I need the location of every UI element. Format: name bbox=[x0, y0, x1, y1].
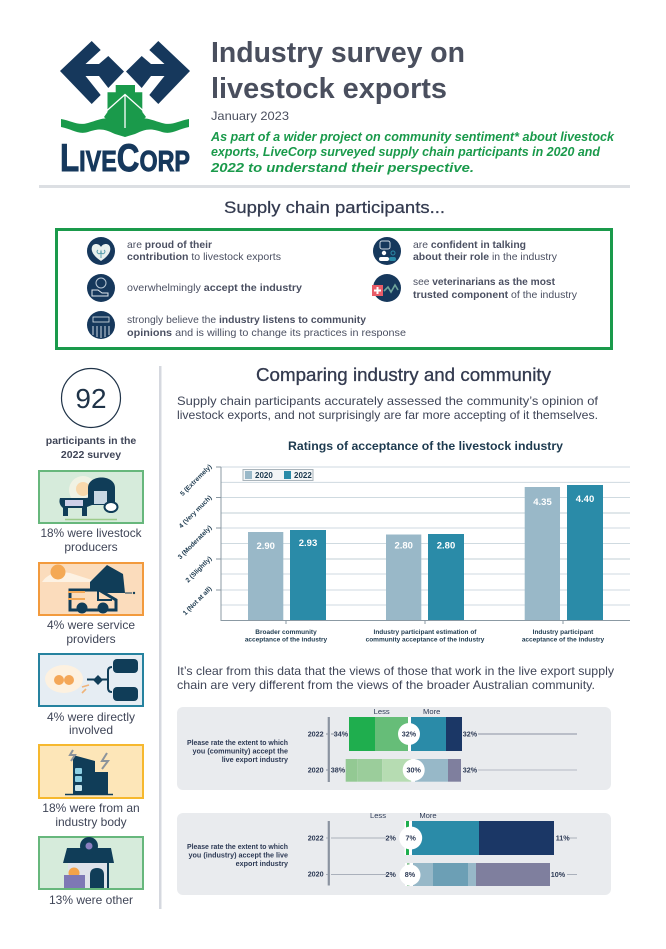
finding: listens: opinions and is willing to change its practices in response bbox=[127, 327, 406, 339]
card: service providers bbox=[39, 563, 143, 615]
card: livestock producers bbox=[39, 471, 143, 523]
title: Industry survey on bbox=[211, 37, 465, 69]
text block: comparing intro: Supply chain participants accurately assessed the community’s opinion of bbox=[177, 394, 599, 408]
bars 2022 bbox=[412, 821, 554, 855]
text block: views differ: chain are very different from the views of the broader Australian community. bbox=[177, 678, 595, 692]
bar values: 4.35 bbox=[533, 497, 552, 508]
legend: 2022 bbox=[294, 471, 312, 480]
label: livestock producers bbox=[40, 526, 142, 554]
finding: listens bbox=[127, 314, 406, 339]
legend bbox=[243, 470, 313, 480]
finding: veterinarians: trusted component of the industry bbox=[413, 289, 578, 301]
stat: 92 participants: participants in the bbox=[46, 435, 136, 447]
data labels: 2020 bbox=[308, 766, 324, 774]
panel: community acceptance chart bbox=[177, 707, 611, 790]
bars 2020 bbox=[346, 759, 461, 782]
y axis labels: 5 (Extremely) bbox=[179, 463, 213, 498]
data labels: 32% bbox=[402, 730, 417, 738]
data labels: 34% bbox=[334, 730, 349, 738]
data labels: 30% bbox=[407, 766, 421, 774]
y axis labels: 3 (Moderately) bbox=[177, 524, 213, 561]
logo arrows bbox=[60, 41, 190, 104]
finding: confident bbox=[413, 239, 558, 263]
data labels bbox=[308, 811, 570, 879]
label: service providers: providers bbox=[66, 632, 116, 646]
data labels: Less bbox=[370, 811, 386, 820]
x axis labels bbox=[245, 629, 605, 644]
label: industry body bbox=[42, 801, 140, 829]
question: live export industry bbox=[222, 755, 288, 764]
bars 2020 bbox=[413, 863, 550, 886]
stat: 92 participants bbox=[46, 368, 136, 461]
label: service providers bbox=[47, 618, 135, 646]
question: export industry bbox=[236, 859, 288, 868]
y axis labels: 2 (Slightly) bbox=[185, 555, 213, 584]
legend: 2020 bbox=[255, 471, 273, 480]
bar values: 2.93 bbox=[299, 538, 317, 549]
title: livestock exports bbox=[211, 73, 447, 105]
logo wordmark: LIVECORP bbox=[60, 137, 190, 180]
finding: confident: are confident in talking bbox=[413, 239, 526, 251]
label: directly involved bbox=[47, 710, 135, 737]
heading: comparing industry and community: Comparing industry and community bbox=[256, 365, 551, 385]
text block: comparing intro: livestock exports, and not surprisingly are far more accepting of it themselves. bbox=[177, 408, 598, 422]
data labels: 8% bbox=[405, 870, 416, 879]
x axis labels: Industry participant estimation of bbox=[374, 629, 477, 636]
icon: veterinarian bbox=[372, 274, 401, 302]
intro text: As part of a wider project on community sentiment* about livestock bbox=[210, 130, 615, 144]
y axis labels bbox=[177, 463, 213, 617]
finding: proud: contribution to livestock exports bbox=[127, 251, 281, 263]
title bbox=[211, 37, 465, 105]
stat: 92 participants: 2022 survey bbox=[61, 449, 121, 461]
intro text: exports, LiveCorp surveyed supply chain participants in 2020 and bbox=[211, 145, 600, 159]
finding: accept: overwhelmingly accept the industry bbox=[127, 282, 302, 294]
finding: proud bbox=[127, 239, 281, 263]
question: Please rate the extent to which bbox=[187, 738, 288, 747]
x axis labels: acceptance of the industry bbox=[522, 636, 605, 644]
card: industry body bbox=[39, 745, 143, 798]
data labels: 2020 bbox=[308, 870, 324, 878]
data labels: 32% bbox=[463, 766, 478, 774]
question: Please rate the extent to which bbox=[187, 842, 288, 851]
text block: views differ bbox=[177, 664, 614, 692]
data labels: More bbox=[423, 707, 440, 716]
bar chart: ratings of acceptance bbox=[177, 439, 630, 644]
question bbox=[187, 738, 288, 764]
logo: LiveCorp bbox=[60, 41, 190, 180]
bars 2022 bbox=[349, 717, 462, 751]
data labels: 38% bbox=[331, 766, 346, 774]
label: industry body: industry body bbox=[55, 815, 127, 829]
finding: listens: strongly believe the industry listens to community bbox=[127, 314, 366, 326]
label: directly involved: involved bbox=[69, 723, 113, 737]
x axis labels: acceptance of the industry bbox=[245, 636, 328, 644]
intro text bbox=[210, 130, 615, 175]
data labels: 2% bbox=[386, 870, 397, 879]
stat: 92 participants: 92 bbox=[75, 383, 107, 414]
bar values bbox=[256, 494, 594, 552]
text block: views differ: It’s clear from this data that the views of those that work in the live export supply bbox=[177, 664, 614, 678]
question bbox=[187, 842, 288, 868]
label: directly involved: 4% were directly bbox=[47, 710, 135, 724]
card: directly involved bbox=[39, 654, 143, 706]
logo ship and wave bbox=[61, 85, 189, 137]
label: other: 13% were other bbox=[49, 893, 133, 907]
finding: proud: are proud of their bbox=[127, 239, 212, 251]
data labels: 2022 bbox=[308, 730, 324, 738]
label: industry body: 18% were from an bbox=[42, 801, 140, 815]
x axis labels: community acceptance of the industry bbox=[366, 636, 485, 644]
data labels: 11% bbox=[556, 834, 570, 842]
text block: comparing intro bbox=[177, 394, 599, 422]
panel: participants sidebar bbox=[39, 368, 143, 907]
bar values: 4.40 bbox=[576, 494, 594, 505]
x axis labels: Industry participant bbox=[533, 629, 594, 636]
panel: industry acceptance chart bbox=[177, 811, 611, 895]
finding: confident: about their role in the industry bbox=[413, 251, 558, 263]
bars 2022 bbox=[290, 485, 603, 620]
intro text: 2022 to understand their perspective. bbox=[210, 161, 474, 175]
finding: veterinarians: see veterinarians as the most bbox=[413, 276, 555, 288]
data labels: Less bbox=[374, 707, 390, 716]
y axis labels: 1 (Not at all) bbox=[182, 585, 213, 617]
x axis labels: Broader community bbox=[255, 629, 317, 636]
label: livestock producers: producers bbox=[64, 540, 118, 554]
label: service providers: 4% were service bbox=[47, 618, 135, 632]
card: other bbox=[39, 837, 143, 889]
data labels: 7% bbox=[406, 834, 417, 842]
data labels: 32% bbox=[463, 730, 478, 738]
data labels bbox=[308, 707, 478, 774]
data labels: 10% bbox=[551, 870, 566, 879]
icon: listening group bbox=[87, 311, 115, 339]
bar values: 2.80 bbox=[437, 540, 455, 552]
question: you (industry) accept the live bbox=[189, 850, 288, 860]
data labels: 2022 bbox=[308, 834, 324, 842]
icon: heart bbox=[87, 237, 115, 265]
chart title: Ratings of acceptance of the livestock industry bbox=[288, 439, 563, 453]
date: January 2023 bbox=[211, 109, 289, 123]
heading: supply chain participants: Supply chain participants... bbox=[224, 198, 445, 217]
bar values: 2.90 bbox=[256, 541, 275, 552]
bar values: 2.80 bbox=[394, 540, 413, 552]
panel: supply chain participants findings bbox=[56, 230, 612, 348]
icon: talking bbox=[373, 237, 401, 265]
question: you (community) accept the bbox=[193, 746, 288, 756]
y axis labels: 4 (Very much) bbox=[178, 494, 213, 530]
icon: accept bbox=[87, 274, 115, 302]
finding: veterinarians bbox=[413, 276, 578, 301]
bars 2020 bbox=[248, 487, 560, 620]
label: livestock producers: 18% were livestock bbox=[40, 526, 142, 540]
data labels: 2% bbox=[386, 834, 397, 842]
data labels: More bbox=[419, 811, 437, 820]
